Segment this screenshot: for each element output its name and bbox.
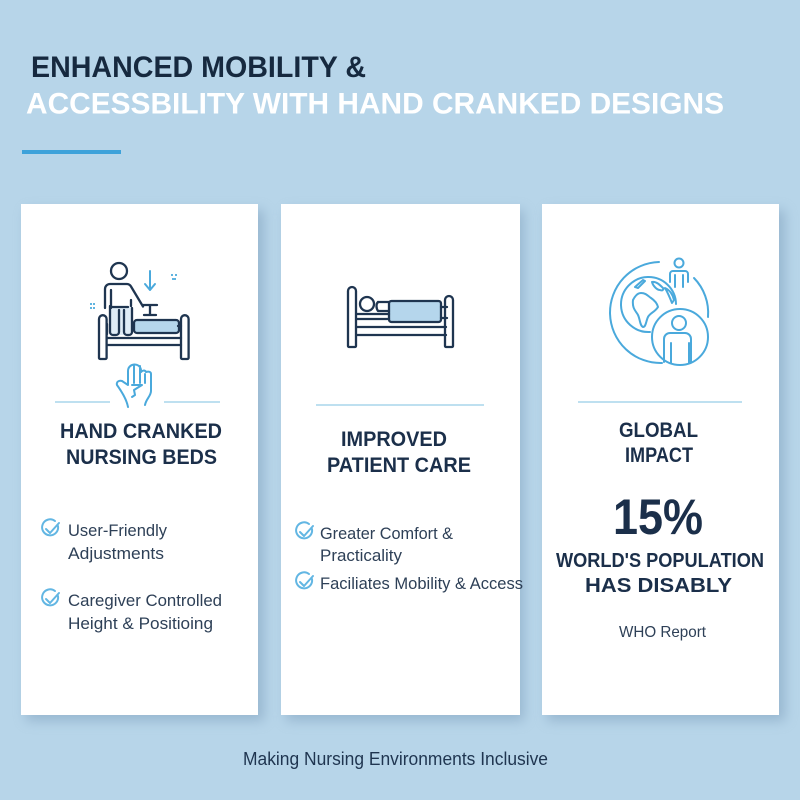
title: ENHANCED MOBILITY & <box>31 51 366 84</box>
source: WHO Report <box>619 624 707 641</box>
heading: IMPROVED <box>341 428 447 451</box>
bullet: user-friendly adjustments <box>42 519 167 563</box>
heading <box>327 428 471 477</box>
stat caption <box>556 550 764 597</box>
bullet: user-friendly adjustments: Adjustments <box>68 544 164 563</box>
title accent bar <box>22 150 121 154</box>
title <box>26 51 724 120</box>
panel: hand cranked nursing beds <box>21 204 264 721</box>
icon: hand <box>117 364 151 407</box>
bullet: greater comfort: Practicality <box>320 546 402 565</box>
heading: PATIENT CARE <box>327 454 471 477</box>
bullet: greater comfort <box>296 522 454 565</box>
panel: improved patient care <box>281 204 524 721</box>
stat caption: HAS DISABLY <box>585 575 733 597</box>
bullet: caregiver controlled: Caregiver Controlled <box>68 591 222 610</box>
stat caption: WORLD'S POPULATION <box>556 550 764 572</box>
bullet: user-friendly adjustments: User-Friendly <box>68 521 167 540</box>
title: ACCESSBILITY WITH HAND CRANKED DESIGNS <box>26 88 724 120</box>
heading: HAND CRANKED <box>60 420 222 443</box>
icon: caregiver adjusting bed <box>90 263 189 359</box>
footer: Making Nursing Environments Inclusive <box>243 749 548 769</box>
divider <box>316 404 484 406</box>
heading <box>619 419 698 467</box>
bullet: facilitates mobility: Faciliates Mobility & Access <box>320 574 523 593</box>
heading: NURSING BEDS <box>66 446 217 469</box>
icon: globe with people <box>610 258 708 365</box>
heading <box>60 420 222 469</box>
divider left <box>55 401 220 403</box>
icon: patient in bed <box>348 287 453 347</box>
heading: GLOBAL <box>619 419 698 442</box>
heading: IMPACT <box>625 444 693 467</box>
divider <box>578 401 742 403</box>
bullet: caregiver controlled <box>42 589 222 633</box>
bullet: greater comfort: Greater Comfort & <box>320 524 454 543</box>
panel: global impact <box>542 204 785 721</box>
bullet: caregiver controlled: Height & Positioing <box>68 614 213 633</box>
stat: 15%: 15% <box>613 489 703 545</box>
